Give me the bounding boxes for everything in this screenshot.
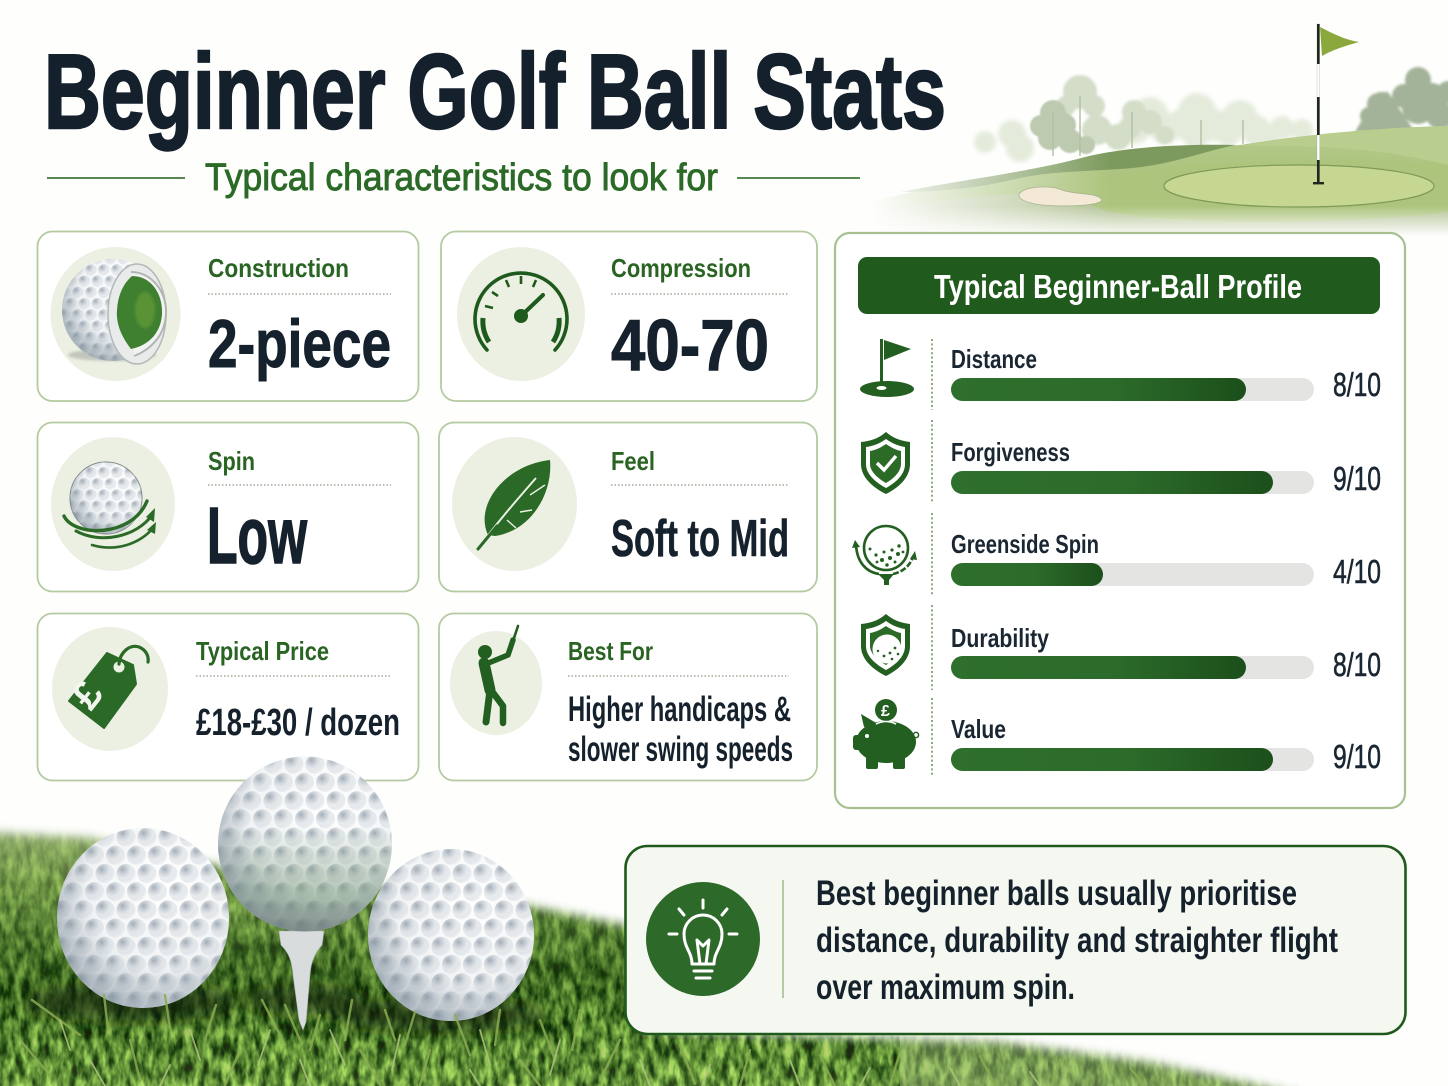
icon: price tag: £ xyxy=(63,673,112,718)
value: best for text: Higher handicaps & xyxy=(568,690,791,729)
panel: feel xyxy=(439,422,817,592)
value: best for text: slower swing speeds xyxy=(568,730,793,769)
value: 40-70: 40-70 xyxy=(611,306,769,386)
ball: centre xyxy=(218,756,392,932)
panel: construction xyxy=(38,232,418,401)
icon: shield with tick xyxy=(861,432,910,494)
icon: shield with ball xyxy=(861,614,910,676)
row: distance: Distance xyxy=(951,344,1037,374)
subtitle: Typical characteristics to look for xyxy=(205,157,718,199)
icon: light bulb xyxy=(646,882,760,996)
value: best for text xyxy=(568,690,793,769)
illustration: grass xyxy=(0,826,1298,1086)
callout text xyxy=(816,874,1338,1007)
icon: feather xyxy=(478,460,550,549)
heading: profile xyxy=(858,257,1380,314)
row: forgiveness xyxy=(861,432,1381,497)
panel: typical price xyxy=(38,614,418,780)
ball: right xyxy=(368,849,534,1021)
label: compression: Compression xyxy=(611,253,751,283)
row: value: Value xyxy=(951,714,1006,744)
panel: spin xyxy=(38,422,418,592)
icon: golfer xyxy=(478,626,518,723)
value: low: Low xyxy=(207,491,307,580)
illustration: hills and fairway xyxy=(870,126,1448,240)
label: best for: Best For xyxy=(568,636,653,666)
callout text: over maximum spin. xyxy=(816,968,1075,1007)
row: greenside spin: Greenside Spin xyxy=(951,529,1099,559)
row: durability: 8/10 xyxy=(1333,646,1381,683)
row: distance: 8/10 xyxy=(1333,366,1381,403)
icon: spinning ball xyxy=(64,462,156,548)
label: spin: Spin xyxy=(208,446,255,476)
panel: best for xyxy=(439,614,817,780)
icon: piggy bank: £ xyxy=(881,703,890,720)
title: Beginner Golf Ball Stats xyxy=(44,33,946,151)
value: price: £18-£30 / dozen xyxy=(196,702,400,744)
illustration: flagstick xyxy=(1313,24,1359,184)
panel: typical beginner-ball profile xyxy=(835,233,1405,808)
row: distance xyxy=(860,339,1381,403)
icon: piggy bank xyxy=(853,699,919,769)
value: soft to mid: Soft to Mid xyxy=(611,510,789,568)
illustration: putting green xyxy=(1164,165,1434,207)
label: feel: Feel xyxy=(611,446,655,476)
panel: compression xyxy=(441,232,817,401)
icon: flag on green xyxy=(860,339,914,397)
icon: ball with spin arrows xyxy=(852,526,917,585)
row: forgiveness: Forgiveness xyxy=(951,437,1070,467)
row: greenside spin: 4/10 xyxy=(1333,553,1381,590)
icon: price tag xyxy=(63,646,148,728)
row: greenside spin xyxy=(852,526,1381,590)
callout xyxy=(626,846,1406,1034)
illustration: golf course landscape xyxy=(870,24,1448,240)
tee xyxy=(279,931,324,1030)
ball: left xyxy=(57,828,229,1008)
label: construction: Construction xyxy=(208,253,349,283)
grass blades in front xyxy=(20,995,1145,1086)
illustration: sand bunker xyxy=(1019,187,1102,206)
shadows under balls xyxy=(20,984,550,1031)
row: durability: Durability xyxy=(951,623,1049,653)
row: value: 9/10 xyxy=(1333,738,1381,775)
callout text: Best beginner balls usually prioritise xyxy=(816,874,1297,913)
heading: profile: Typical Beginner-Ball Profile xyxy=(934,268,1302,305)
illustration: distant trees xyxy=(974,67,1448,162)
row: value xyxy=(853,699,1381,775)
value: 2-piece: 2-piece xyxy=(208,306,391,382)
row: durability xyxy=(861,614,1381,683)
illustration: golf balls on tee xyxy=(20,756,1145,1086)
icon: gauge xyxy=(475,273,567,350)
label: typical price: Typical Price xyxy=(196,636,329,666)
row: forgiveness: 9/10 xyxy=(1333,460,1381,497)
icon: cutaway two-piece ball xyxy=(62,259,166,364)
